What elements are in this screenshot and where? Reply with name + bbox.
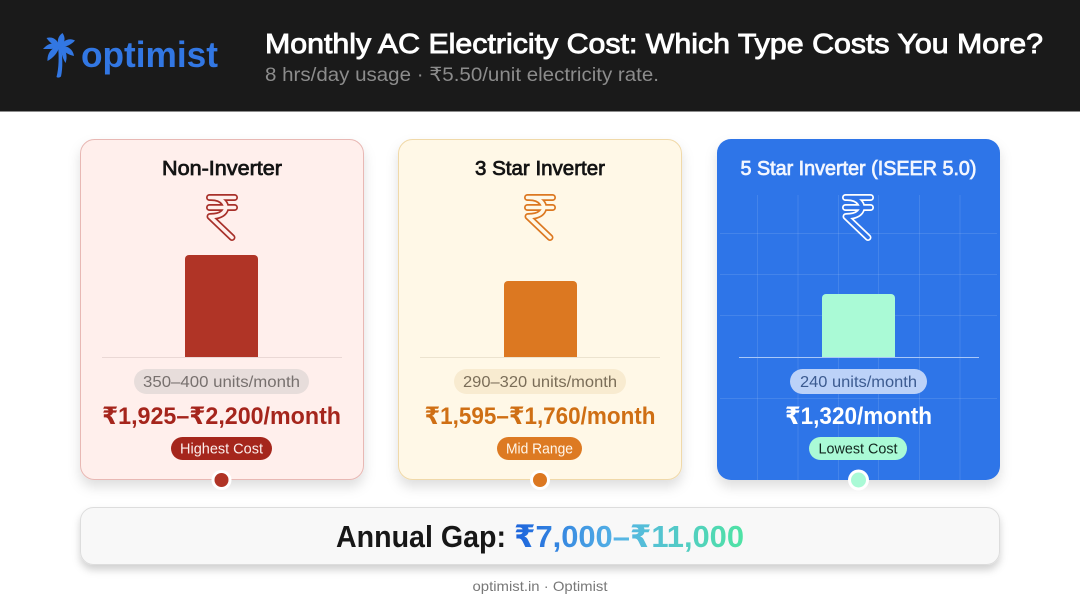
panel: non-inverter <box>80 140 364 490</box>
bar <box>185 255 258 357</box>
tag: lowest cost: Lowest Cost <box>818 442 898 458</box>
bar <box>822 294 895 357</box>
header band <box>0 0 1080 112</box>
title: Monthly AC Electricity Cost: Which Type Costs You More? <box>265 28 1043 59</box>
tag: mid range <box>497 437 582 460</box>
price: ₹1,595–₹1,760/month <box>424 403 656 430</box>
price: ₹1,925–₹2,200/month <box>102 403 341 430</box>
card heading: 3 Star Inverter <box>475 158 605 180</box>
units pill: 290–320 units/month <box>463 374 617 391</box>
card heading: Non-Inverter <box>162 158 282 180</box>
bar <box>504 281 577 357</box>
units pill <box>454 369 626 394</box>
annual gap panel <box>80 508 1000 564</box>
marker dot <box>212 470 232 490</box>
units pill: 240 units/month <box>800 374 917 391</box>
marker dot <box>848 470 869 490</box>
annual gap value: ₹7,000–₹11,000 <box>514 519 744 554</box>
tag: highest cost <box>171 437 272 460</box>
icon: palm tree <box>43 33 75 78</box>
tag: highest cost: Highest Cost <box>180 442 263 458</box>
panel: 5 star inverter <box>717 139 1000 490</box>
panel: 3 star inverter <box>398 140 682 490</box>
units pill <box>134 369 309 394</box>
logo wordmark: optimist <box>81 34 218 75</box>
price: ₹1,320/month <box>785 403 932 430</box>
footer: optimist.in · Optimist <box>472 578 608 594</box>
tag: mid range: Mid Range <box>506 442 573 458</box>
icon: rupee outline <box>210 198 234 238</box>
marker dot <box>530 470 550 490</box>
units pill <box>790 369 927 394</box>
icon: rupee outline <box>528 198 552 238</box>
annual gap label: Annual Gap: <box>336 519 506 554</box>
card heading: 5 Star Inverter (ISEER 5.0) <box>740 158 976 180</box>
tag: lowest cost <box>809 437 907 460</box>
subtitle: 8 hrs/day usage · ₹5.50/unit electricity rate. <box>265 64 659 86</box>
units pill: 350–400 units/month <box>143 374 300 391</box>
logo <box>43 33 218 78</box>
icon: rupee outline <box>846 198 870 238</box>
